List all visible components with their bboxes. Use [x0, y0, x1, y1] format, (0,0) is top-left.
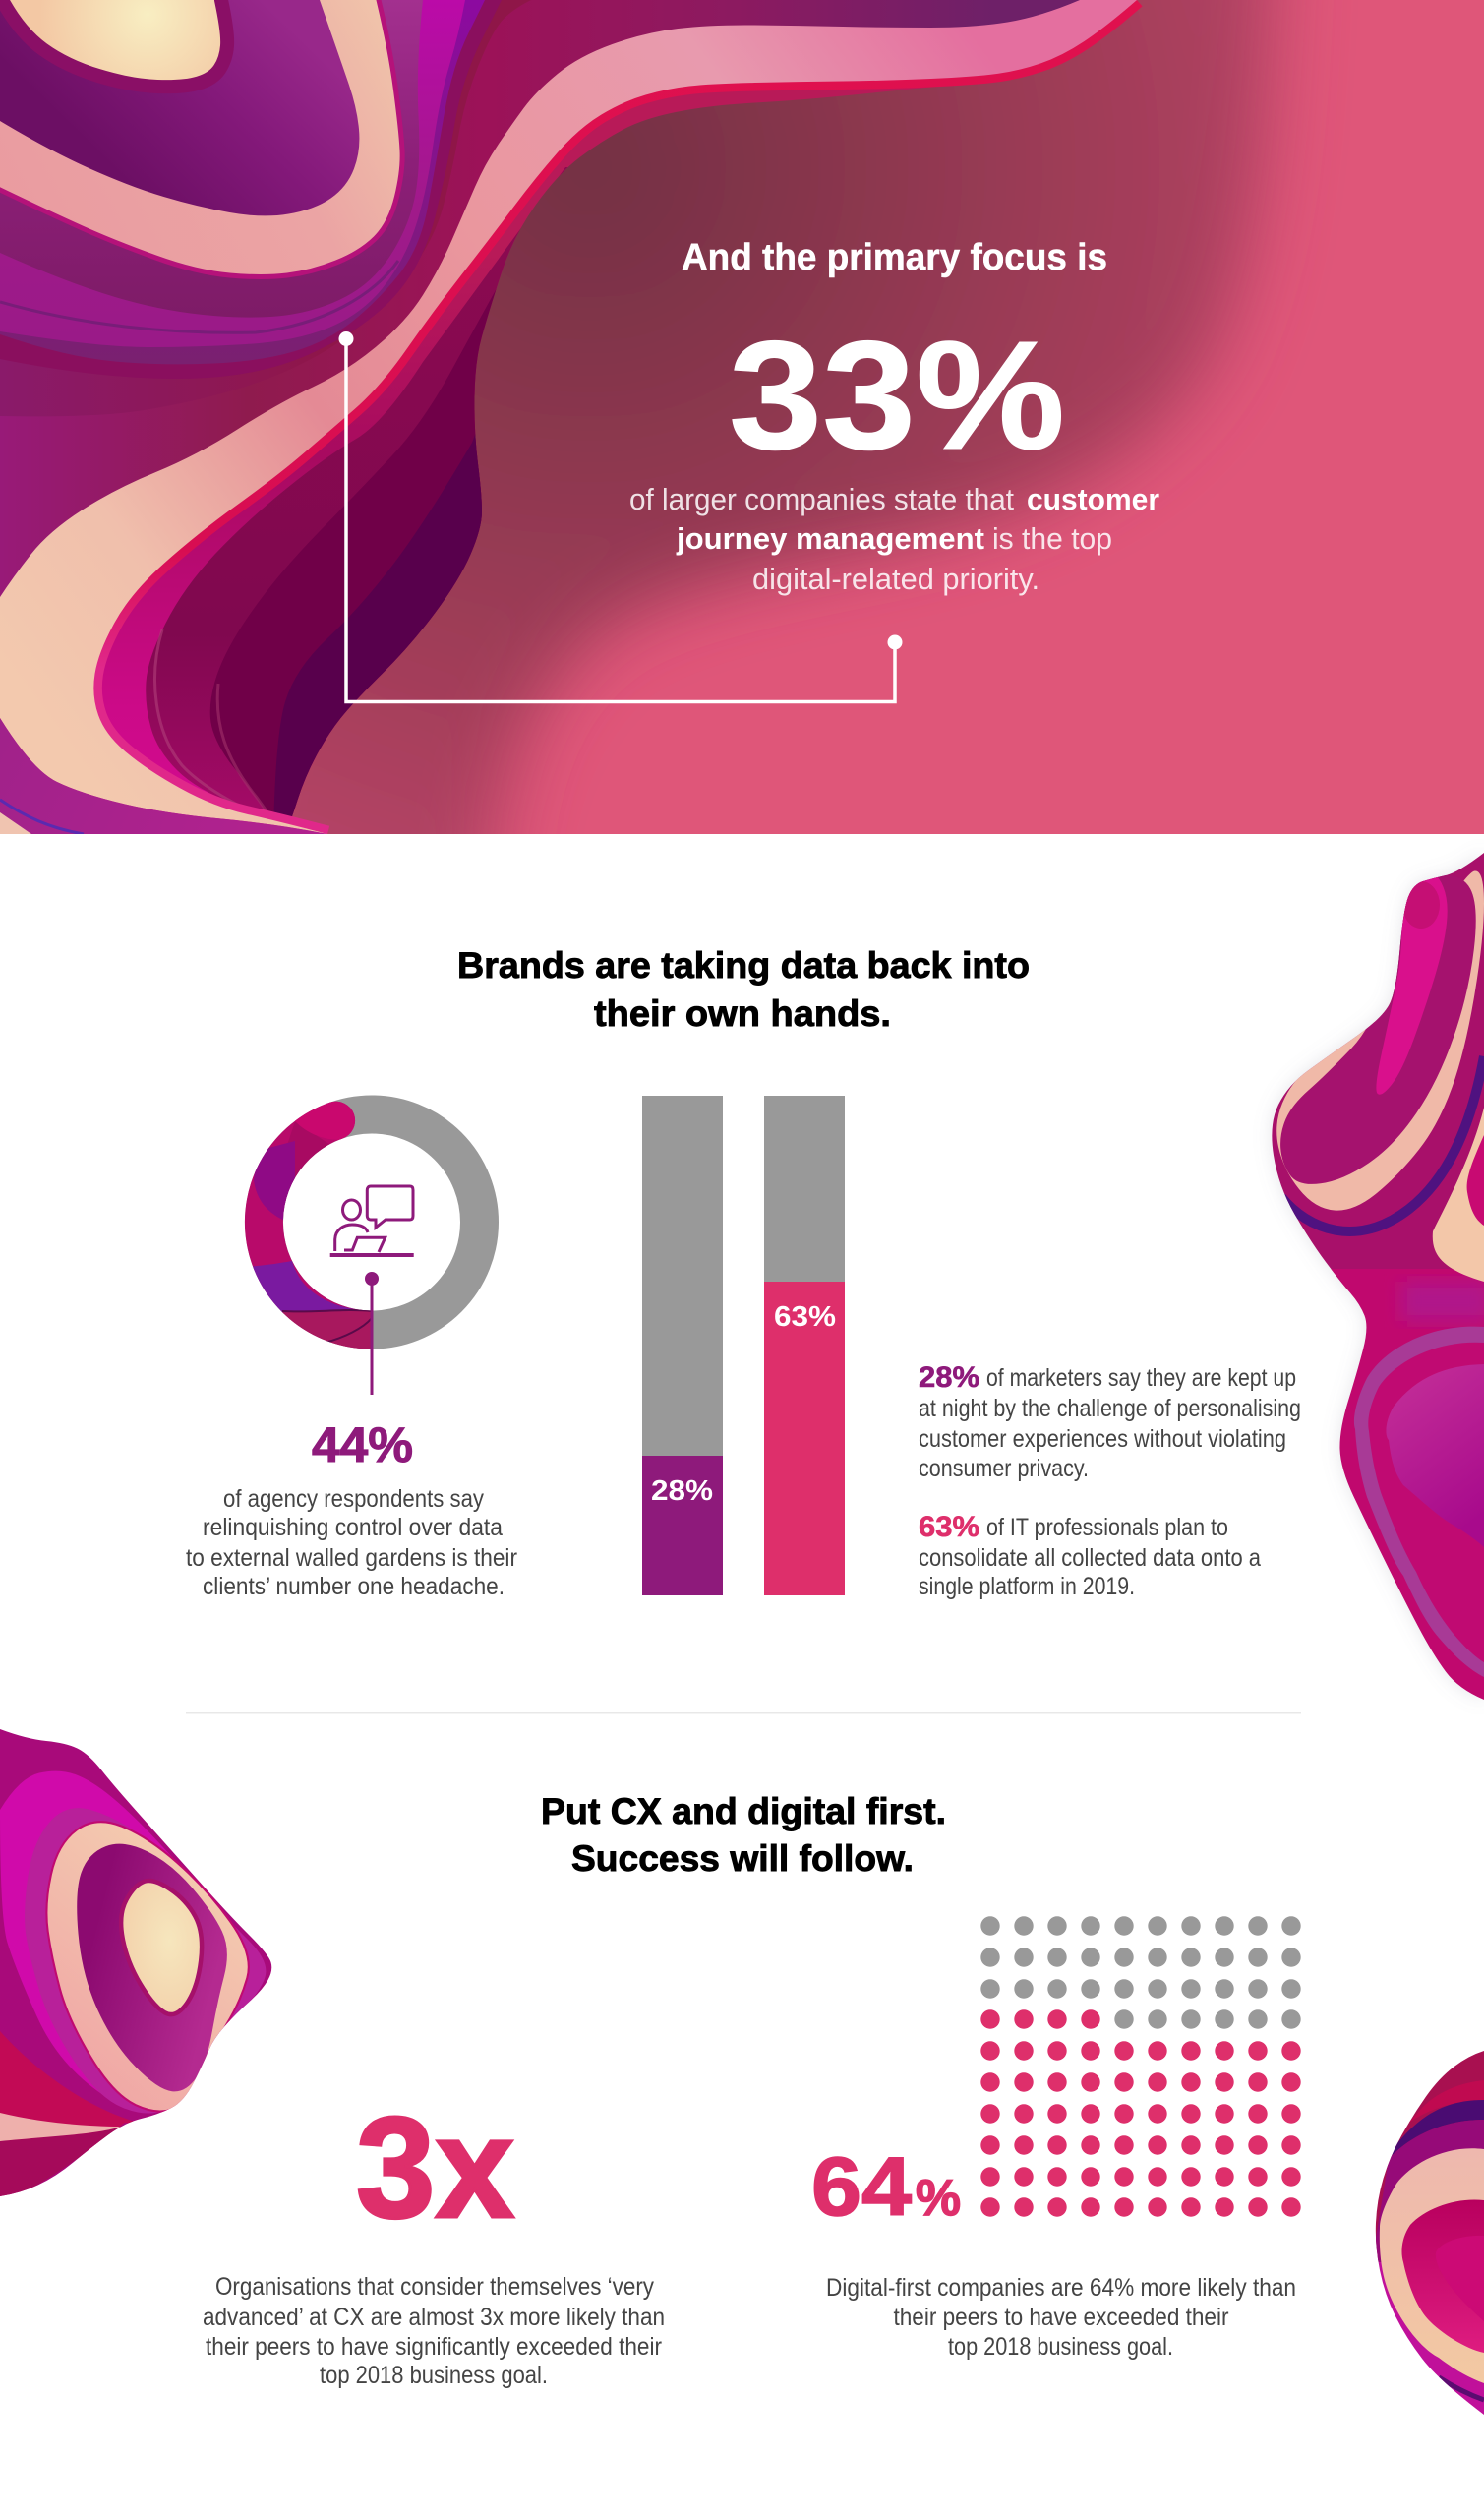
text: 64% caption: their peers to have exceeded their: [893, 2304, 1229, 2331]
bar chart: [642, 1096, 845, 1595]
hero description: customer: [1027, 482, 1159, 516]
text: agency respondents: of agency respondents say: [223, 1485, 484, 1513]
text: 28% marketers: customer experiences without violating: [919, 1425, 1286, 1453]
text: 63% IT professionals: single platform in 2019.: [919, 1573, 1135, 1600]
text: 3x caption: top 2018 business goal.: [320, 2362, 548, 2389]
dot matrix: 64 of 100: [980, 1916, 1301, 2217]
stat: 44%: 44%: [312, 1417, 413, 1472]
bar: 28%: [642, 1096, 723, 1595]
text: 64% caption: top 2018 business goal.: [948, 2333, 1173, 2361]
section heading: CX and digital: [541, 1791, 946, 1879]
pink and cream band: [0, 0, 1137, 834]
purple layers under the band: [0, 718, 327, 834]
section heading: brands: Brands are taking data back into: [457, 945, 1030, 986]
hero description: is the top: [992, 521, 1112, 556]
text: 63% IT professionals: of IT professionals plan to: [986, 1514, 1228, 1541]
text: 63% IT professionals: consolidate all collected data onto a: [919, 1544, 1261, 1572]
donut art segment: [244, 1102, 370, 1349]
text: 28% marketers: of marketers say they are kept up: [986, 1364, 1296, 1392]
decorative blob: lower right: [1375, 2051, 1484, 2415]
pink dots: [980, 2009, 1301, 2217]
stripes right of the band: [0, 87, 929, 820]
section heading: brands: their own hands.: [594, 993, 891, 1034]
grey dots: [980, 1916, 1301, 2029]
text: agency respondents: to external walled gardens is their: [186, 1544, 517, 1572]
hero description: of larger companies state that: [629, 482, 1014, 516]
hero description: journey management: [676, 521, 984, 556]
text: 64% caption: [826, 2274, 1296, 2361]
section heading: brands: [457, 945, 1030, 1034]
text: 28% marketers: [919, 1361, 1301, 1482]
big stat: 64%: [811, 2140, 961, 2233]
layered region above the band: [0, 0, 1080, 597]
text: 28% marketers: at night by the challenge of personalising: [919, 1395, 1301, 1422]
red edge of the band: [93, 0, 1137, 834]
big stat: 64%: %: [916, 2170, 961, 2227]
big stat: 3x: 3x: [356, 2087, 514, 2248]
text: 28% marketers: 28%: [919, 1361, 979, 1394]
donut chart: 44%: [236, 1087, 480, 1395]
text: agency respondents: clients’ number one headache.: [203, 1573, 505, 1600]
section heading: CX and digital: Put CX and digital first.: [541, 1791, 946, 1831]
text: agency respondents: relinquishing control over data: [203, 1514, 503, 1541]
text: 3x caption: their peers to have significantly exceeded their: [206, 2333, 662, 2361]
text: 3x caption: Organisations that consider themselves ‘very: [215, 2273, 654, 2301]
panel: hero: [0, 0, 1484, 834]
text: 28% marketers: consumer privacy.: [919, 1455, 1089, 1482]
hero background: [442, 0, 1484, 834]
hero description: [629, 482, 1159, 596]
bar: 63%: 63%: [774, 1301, 836, 1333]
hero description: digital-related priority.: [752, 562, 1039, 596]
hero abstract wave art: [0, 0, 1180, 834]
big stat: 64%: 64: [811, 2140, 912, 2233]
section heading: CX and digital: Success will follow.: [571, 1838, 914, 1879]
text: 64% caption: Digital-first companies are 64% more likely than: [826, 2274, 1296, 2302]
hero drop shadow: [292, 0, 1306, 834]
text: 63% IT professionals: [919, 1511, 1261, 1600]
hero heading: And the primary focus is: [682, 237, 1107, 278]
icon: person at laptop with speech bubble: [330, 1186, 414, 1255]
decorative blob: upper right: [1259, 846, 1484, 1711]
donut callout line: [365, 1272, 379, 1395]
big stat: 33%: 33%: [729, 310, 1065, 482]
connector line with dots: [338, 331, 903, 702]
bar: 28%: 28%: [651, 1475, 713, 1507]
decorative blob: left: [0, 1721, 285, 2203]
text: 63% IT professionals: 63%: [919, 1511, 979, 1543]
text: agency respondents: [186, 1485, 517, 1600]
bar: 63%: [764, 1096, 845, 1595]
text: 3x caption: advanced’ at CX are almost 3x more likely than: [203, 2304, 665, 2331]
text: 3x caption: [203, 2273, 665, 2389]
